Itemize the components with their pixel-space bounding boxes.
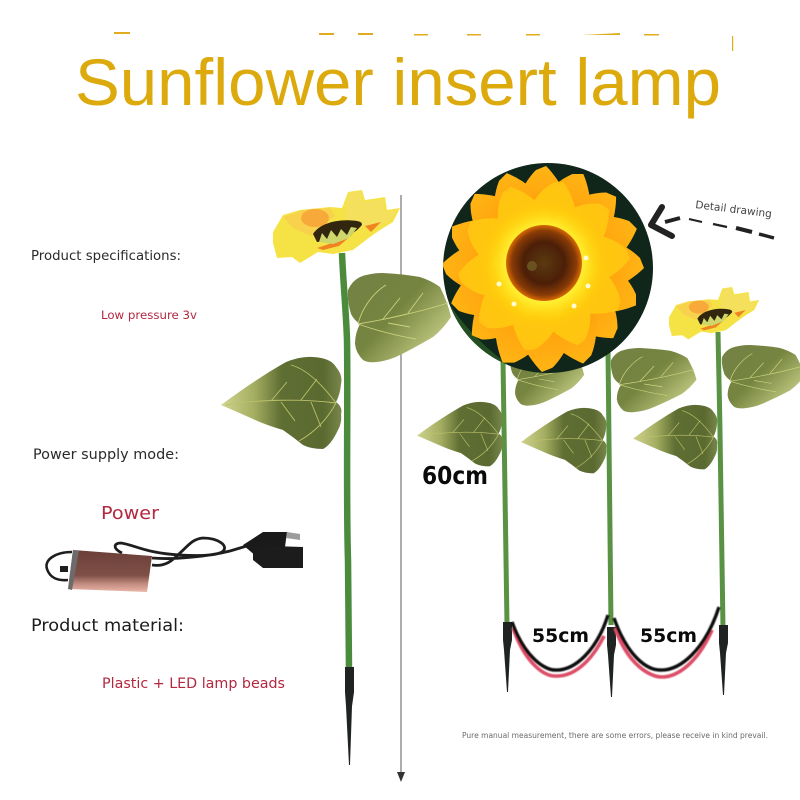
- left leaf: [633, 405, 717, 469]
- icon: power adapter with cable: [47, 532, 303, 592]
- left leaf: [417, 402, 503, 466]
- stake: [719, 625, 728, 695]
- footnote: Pure manual measurement, there are some errors, please receive in kind prevail.: [462, 731, 768, 740]
- plant 2: [521, 348, 696, 697]
- plant 1: [417, 345, 584, 692]
- lower leaf: [221, 357, 341, 449]
- spacing curves: [512, 607, 719, 677]
- spacing label left: 55cm: [532, 625, 589, 647]
- right leaf: [722, 345, 800, 408]
- upper leaf: [348, 273, 451, 362]
- callout arrow: [651, 207, 774, 238]
- plant 3: [633, 287, 800, 695]
- spacing label right: 55cm: [640, 625, 697, 647]
- stake: [503, 622, 512, 692]
- flower head: [273, 190, 400, 263]
- stem: [342, 253, 349, 670]
- callout text: Detail drawing: [695, 199, 773, 220]
- label: power supply mode: Power supply mode:: [33, 447, 179, 463]
- right leaf: [611, 348, 696, 412]
- large sunflower lamp: [221, 190, 451, 765]
- title decoration: cropped marks: [114, 32, 733, 51]
- stake: [345, 667, 354, 765]
- label: product material: Product material:: [31, 616, 184, 636]
- right leaf: [510, 345, 584, 406]
- leaf peeking in circle: [450, 306, 511, 366]
- title: Sunflower insert lamp: [75, 45, 721, 119]
- value: low pressure: Low pressure 3v: [101, 308, 197, 322]
- value: material: Plastic + LED lamp beads: [102, 676, 285, 692]
- flower head: [669, 287, 759, 340]
- detail circle: lit sunflower close-up: [440, 162, 653, 378]
- stake: [607, 627, 616, 697]
- label: product specifications: Product specifications:: [31, 248, 181, 264]
- height measurement arrow: [397, 195, 405, 782]
- height label: 60cm: [422, 461, 488, 490]
- stem: [503, 360, 507, 625]
- value: power: Power: [101, 503, 160, 524]
- stem: [718, 332, 723, 628]
- stem: [608, 350, 611, 625]
- left leaf: [521, 408, 607, 473]
